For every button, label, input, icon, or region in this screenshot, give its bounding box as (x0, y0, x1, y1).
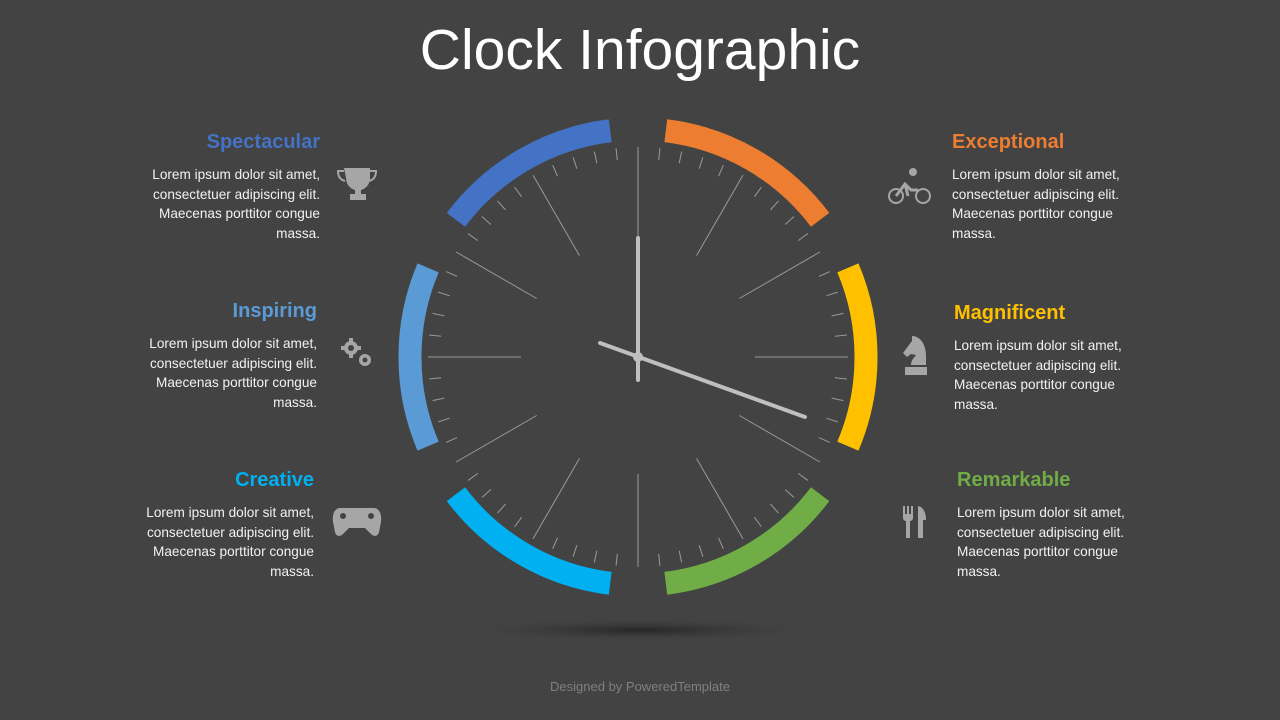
icon: gears (341, 338, 371, 366)
text: Inspiring: Lorem ipsum dolor sit amet, consectetuer adipiscing elit. Maecenas porttitor congue massa. (149, 336, 317, 410)
text: Magnificent: Lorem ipsum dolor sit amet, consectetuer adipiscing elit. Maecenas porttitor congue massa. (954, 338, 1122, 412)
text: Remarkable (957, 469, 1125, 578)
text: Exceptional (952, 131, 1120, 240)
text: Exceptional: Exceptional (952, 131, 1064, 153)
icon: trophy (338, 168, 376, 200)
footer: Designed by PoweredTemplate (550, 679, 730, 694)
title: Clock Infographic (420, 18, 860, 82)
text: Remarkable: Lorem ipsum dolor sit amet, consectetuer adipiscing elit. Maecenas porttitor congue massa. (957, 505, 1125, 578)
text: Inspiring (149, 300, 317, 410)
text: Magnificent: Magnificent (954, 302, 1065, 324)
icon: fork knife (903, 506, 926, 538)
text: Creative: Lorem ipsum dolor sit amet, consectetuer adipiscing elit. Maecenas porttitor congue massa. (146, 505, 314, 578)
icon: gamepad (333, 508, 381, 536)
ticks (428, 147, 848, 567)
text: Inspiring: Inspiring (233, 300, 317, 322)
hands (600, 238, 805, 417)
icon: bicycle (889, 169, 930, 203)
text: Remarkable: Remarkable (957, 469, 1070, 491)
text: Exceptional: Lorem ipsum dolor sit amet, consectetuer adipiscing elit. Maecenas porttitor congue massa. (952, 167, 1120, 240)
text: Creative: Creative (235, 469, 314, 491)
text: Spectacular: Spectacular (207, 131, 320, 153)
text: Spectacular (152, 131, 320, 240)
shadow (450, 618, 830, 642)
text: Magnificent (954, 302, 1122, 412)
text: Spectacular: Lorem ipsum dolor sit amet, consectetuer adipiscing elit. Maecenas porttitor congue massa. (152, 167, 320, 240)
icon: chess knight (903, 336, 927, 375)
text: Creative (146, 469, 314, 578)
arcs (410, 131, 866, 583)
